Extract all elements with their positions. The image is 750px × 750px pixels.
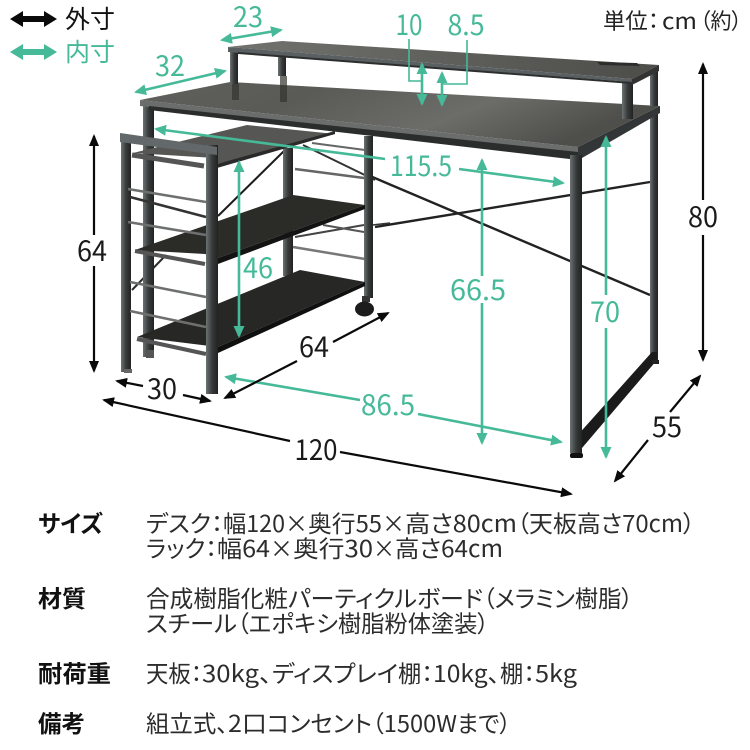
spec: material: 樹脂粉体塗装）: [338, 605, 489, 639]
dimension 8.5: 8.5: [448, 4, 484, 44]
spec: size: ×: [373, 530, 395, 564]
dimension 10: [396, 4, 422, 104]
spec: material: 合成樹脂化粧: [146, 580, 288, 614]
spec: size: 高さ80cm: [405, 505, 517, 539]
spec: notes: 2口: [228, 705, 267, 739]
spec: notes: 備考: [38, 705, 85, 739]
furniture photo: desk with rack: [120, 41, 660, 458]
dimension 30: 30: [147, 368, 177, 408]
spec: size: [38, 505, 695, 564]
spec: notes: [38, 705, 511, 739]
legend: inner dimensions: [10, 33, 115, 69]
rack shelves: [133, 125, 365, 353]
spec: material: パーティクルボード: [288, 580, 483, 614]
dimension 66.5: 66.5: [450, 269, 506, 309]
spec: material: （エポキシ: [237, 605, 338, 639]
dimension 86.5: [226, 377, 561, 442]
spec: material: スチール: [146, 605, 237, 639]
dimension 55: [615, 376, 700, 481]
dimension 55: 55: [652, 406, 682, 446]
spec: size: 幅120: [223, 505, 285, 539]
desk back right leg: [576, 112, 659, 448]
dimension 46: 46: [243, 247, 273, 287]
legend: outer dimensions: 外寸: [65, 0, 115, 36]
dimension 115.5: 115.5: [390, 145, 452, 185]
dimension 120: 120: [294, 429, 338, 469]
spec: size: ラック：: [146, 530, 217, 564]
dimension 32: [136, 45, 225, 92]
spec: size: 奥行30: [293, 530, 373, 564]
spec: size: 幅64: [217, 530, 270, 564]
legend: inner dimensions: 内寸: [65, 33, 115, 69]
dimension 64 width: [225, 313, 388, 398]
rack side frame: [120, 133, 218, 394]
unit label: （約）: [700, 4, 742, 36]
dimension 30: [117, 368, 210, 408]
spec: load capacity: 天板：: [146, 655, 202, 689]
dimension 32: 32: [155, 45, 185, 85]
dimension 10: 10: [396, 4, 422, 44]
spec: load capacity: 5kg: [535, 655, 577, 689]
desk top: [140, 76, 660, 458]
spec: notes: （1500W: [372, 705, 457, 739]
spec: load capacity: 10kg、: [433, 655, 500, 689]
rear rack posts: [143, 106, 373, 358]
monitor shelf: [228, 41, 659, 119]
spec: size: デスク：: [146, 505, 223, 539]
rear braces: [132, 143, 650, 295]
dimension 8.5: [442, 4, 484, 105]
unit label: 単位：: [603, 4, 659, 36]
dimension 86.5: 86.5: [361, 384, 415, 424]
spec: size: サイズ: [38, 505, 103, 539]
spec: size: ×: [270, 530, 293, 564]
dimension 64 width: 64: [299, 326, 329, 366]
legend: outer dimensions: [10, 0, 115, 36]
dimension 120: [104, 400, 571, 494]
spec: load capacity: 耐荷重: [38, 655, 111, 689]
spec: load capacity: 棚：: [500, 655, 535, 689]
dimension 23: [222, 0, 281, 40]
spec: material: （メラミン樹脂）: [483, 580, 633, 614]
spec: notes: 組立式、: [146, 705, 228, 739]
spec: load capacity: ディスプレイ: [272, 655, 398, 689]
spec: load capacity: 30kg、: [202, 655, 272, 689]
spec: size: 高さ64cm: [395, 530, 503, 564]
dimension 64 height: 64: [77, 230, 107, 270]
spec: material: 材質: [38, 580, 86, 614]
dimension 80: 80: [688, 196, 718, 236]
spec: size: ×: [382, 505, 405, 539]
unit label: cm: [662, 4, 697, 36]
spec: size: ×: [285, 505, 308, 539]
spec: material: [38, 580, 633, 639]
dimension 115.5: [156, 129, 563, 185]
caster: [355, 296, 374, 316]
spec: notes: コンセント: [267, 705, 372, 739]
spec: load capacity: [38, 655, 577, 689]
spec: size: （天板高さ70cm）: [517, 505, 695, 539]
spec: size: 奥行55: [308, 505, 382, 539]
spec: notes: まで）: [457, 705, 511, 739]
dimension 70: 70: [590, 291, 620, 331]
spec: load capacity: 棚：: [398, 655, 433, 689]
